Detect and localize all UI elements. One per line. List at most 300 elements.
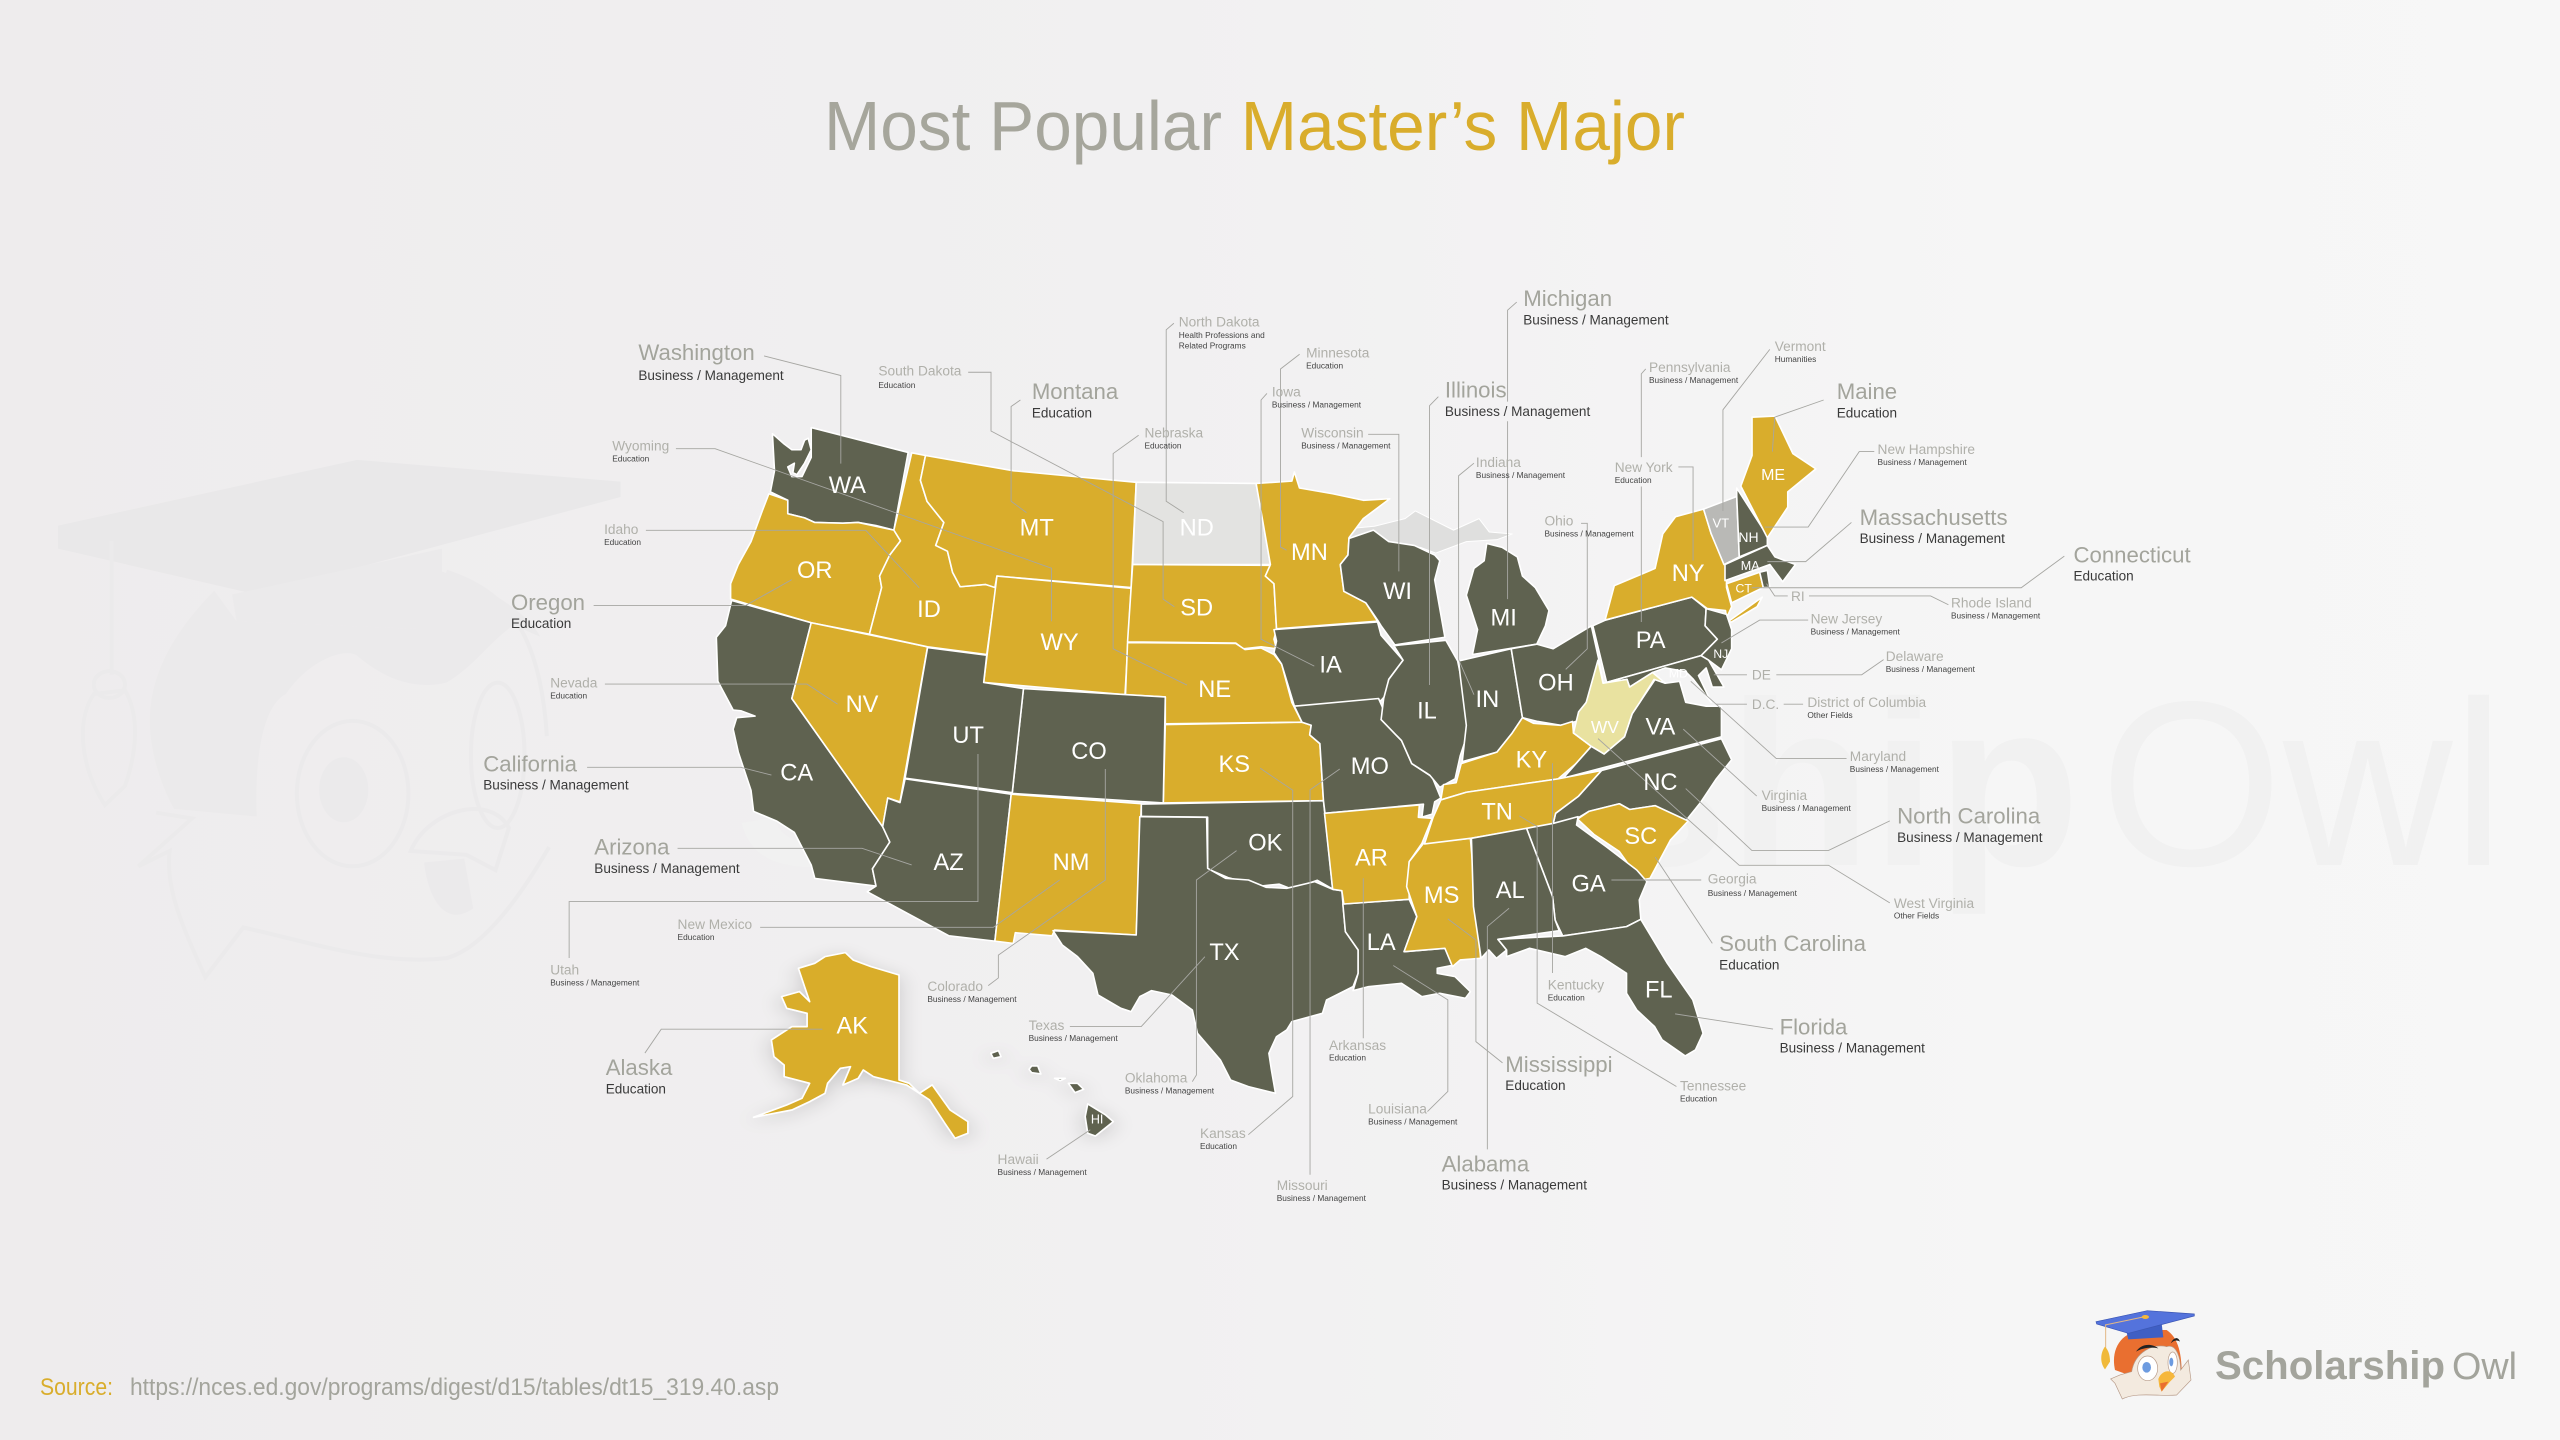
callout: New Jersey (1811, 612, 1900, 637)
callout: Texas (1029, 1018, 1118, 1043)
source line: https://nces.ed.gov/programs/digest/d15/tables/dt15_319.40.asp (130, 1374, 779, 1401)
leader: Missouri (1310, 769, 1340, 1175)
leader: New Jersey (1721, 620, 1808, 643)
icon: owl with graduation cap (2096, 1311, 2194, 1399)
callout: Maine: Education (1837, 405, 1897, 420)
callout: New Jersey: Business / Management (1811, 627, 1900, 637)
callout: Missouri: Business / Management (1277, 1193, 1367, 1203)
leader: Georgia (1611, 879, 1701, 881)
south-eastern states (1471, 817, 1703, 1056)
abbreviation: DE: DE (1752, 668, 1771, 683)
callout: Georgia (1708, 871, 1798, 898)
state: AZ (867, 779, 1011, 941)
callout: Hawaii: Hawaii (998, 1152, 1039, 1167)
state abbreviations: OH (1538, 671, 1574, 697)
state: MI (1466, 544, 1549, 654)
state: NY (1605, 509, 1732, 620)
state abbreviations: ND (1180, 516, 1214, 542)
leader: Kansas (1248, 768, 1293, 1135)
callout: Idaho (604, 522, 641, 547)
source line: Source: (40, 1374, 113, 1401)
leader: Wyoming (676, 449, 1051, 621)
callout: Kansas (1200, 1126, 1246, 1151)
leader: Pennsylvania (1641, 369, 1646, 622)
leader: Maine (1772, 400, 1824, 452)
callout: Alabama: Alabama (1442, 1151, 1530, 1176)
callout: Arkansas (1329, 1038, 1386, 1063)
state: UT (905, 648, 1023, 793)
state: MS (1404, 838, 1481, 967)
callout: Oregon (511, 590, 585, 631)
leader: Oklahoma (1192, 851, 1237, 1082)
callout: Nevada: Nevada (550, 675, 598, 690)
state: NC (1553, 739, 1732, 824)
callout: Pennsylvania (1649, 360, 1739, 385)
callout: Colorado (927, 979, 1017, 1004)
callout: North Dakota: Health Professions and (1179, 330, 1265, 340)
callout: North Dakota (1179, 315, 1265, 351)
state: WV (1573, 660, 1665, 754)
callout: Nebraska: Nebraska (1144, 426, 1204, 441)
callout: Maryland: Business / Management (1850, 764, 1940, 774)
callout: Kentucky: Education (1548, 992, 1585, 1002)
callout: Wisconsin: Business / Management (1301, 440, 1391, 450)
callout: New York (1615, 460, 1673, 485)
callout: Kentucky (1548, 977, 1604, 1002)
state abbreviations: IL (1417, 698, 1437, 724)
state: MO (1294, 699, 1441, 817)
state abbreviations: TX (1209, 940, 1240, 966)
callout: Maine (1837, 379, 1897, 420)
callout: Alabama: Business / Management (1442, 1178, 1587, 1193)
state: KS (1163, 722, 1323, 803)
state: CA (716, 601, 890, 886)
watermark: wordmark: Scholarship (735, 652, 2080, 915)
state: LA (1343, 899, 1470, 998)
callout: California: Business / Management (483, 778, 629, 793)
state abbreviations: NV (846, 692, 879, 718)
callout: West Virginia: West Virginia (1894, 896, 1974, 911)
state: WA (770, 428, 908, 530)
callout: New Hampshire (1878, 442, 1975, 467)
state abbreviations: UT (952, 723, 984, 749)
state: NM (995, 794, 1141, 943)
state: MT (920, 455, 1136, 588)
leader: Rhode Island (1809, 596, 1948, 605)
state: ND (1133, 482, 1270, 565)
state abbreviations: MS (1424, 883, 1459, 909)
leader: Louisiana (1393, 966, 1448, 1112)
state abbreviations: MD (1669, 667, 1688, 681)
callout: Arizona: Arizona (594, 835, 670, 860)
callout: Tennessee (1680, 1079, 1747, 1104)
leader: South Carolina (1655, 857, 1712, 943)
leader: Maryland (1691, 681, 1847, 759)
callout: Florida: Business / Management (1780, 1041, 1925, 1056)
leader: District of Columbia (1716, 703, 1803, 705)
callout: California (483, 751, 629, 793)
callout: Hawaii: Business / Management (998, 1167, 1087, 1177)
state abbreviations: NJ (1713, 647, 1728, 661)
callout: Oklahoma: Business / Management (1125, 1085, 1215, 1095)
upper Michigan and Great Lakes shading (1280, 509, 1512, 553)
state: CT (1727, 572, 1763, 603)
state: ID (869, 453, 996, 654)
state abbreviations: AR (1355, 845, 1388, 871)
callout: Pennsylvania: Pennsylvania (1649, 360, 1731, 375)
callout: Alaska: Alaska (606, 1055, 673, 1080)
callout: Maryland (1850, 749, 1940, 774)
callout: Maryland: Maryland (1850, 749, 1906, 764)
watermark: wordmark: Owl (2100, 652, 2505, 915)
state abbreviations: WI (1383, 579, 1412, 605)
state: AK (754, 953, 968, 1138)
callout: Rhode Island: Rhode Island (1951, 595, 2032, 610)
state: TN (1424, 770, 1602, 844)
state: VA (1563, 679, 1721, 778)
callout: North Dakota: Related Programs (1179, 341, 1246, 351)
state: NJ (1701, 609, 1732, 670)
callout: Wyoming: Wyoming (612, 439, 669, 454)
callout: Michigan: Business / Management (1523, 312, 1669, 327)
callout: New York: New York (1615, 460, 1673, 475)
callout: Oregon: Education (511, 616, 571, 631)
state: NY Long Island (1728, 597, 1762, 622)
leader: West Virginia (1598, 739, 1890, 903)
callout: New Mexico (678, 917, 753, 942)
callout: Wisconsin: Wisconsin (1301, 426, 1364, 441)
state: SC (1578, 804, 1688, 880)
state: CO (1012, 689, 1165, 803)
leader: Wisconsin (1368, 434, 1399, 571)
state abbreviations: WA (829, 473, 866, 499)
callout: North Carolina: Business / Management (1897, 830, 2043, 845)
callout: Virginia (1762, 788, 1851, 813)
callout: Oklahoma (1125, 1070, 1215, 1095)
callout: Rhode Island: Business / Management (1951, 610, 2041, 620)
callout: Mississippi: Education (1505, 1078, 1566, 1093)
state abbreviations: NE (1198, 677, 1231, 703)
callout: Illinois (1445, 378, 1590, 419)
callout: Missouri: Missouri (1277, 1178, 1328, 1193)
state: MN (1256, 472, 1390, 629)
callout: Texas: Business / Management (1029, 1033, 1118, 1043)
state abbreviations: IN (1476, 687, 1499, 713)
callout: Delaware (1886, 649, 1976, 674)
callout: Montana: Montana (1032, 379, 1119, 404)
callout: Wisconsin (1301, 426, 1391, 450)
state abbreviations: MA (1741, 559, 1760, 573)
state abbreviations: AZ (933, 850, 964, 876)
state abbreviations: OR (797, 558, 832, 584)
callout: Colorado: Colorado (927, 979, 983, 994)
callout: Nevada (550, 675, 598, 700)
callout: Michigan: Michigan (1523, 286, 1612, 311)
callout: Alaska: Education (606, 1081, 666, 1096)
callout: Vermont (1775, 339, 1826, 364)
leader: Arkansas (1362, 878, 1364, 1038)
leader: Illinois (1430, 397, 1438, 685)
callout: Connecticut: Connecticut (2073, 542, 2191, 567)
callout: Montana: Education (1032, 405, 1092, 420)
leader: Alabama (1487, 908, 1509, 1149)
state abbreviations: ME (1761, 467, 1785, 484)
south-central states (1053, 805, 1481, 1093)
callout: Alabama (1442, 1151, 1587, 1193)
callout: Iowa: Iowa (1272, 385, 1301, 400)
leader: Vermont (1723, 349, 1770, 511)
leader: New Hampshire (1765, 452, 1874, 527)
callout: Texas: Texas (1029, 1018, 1065, 1033)
leader: South Dakota (968, 372, 1174, 607)
leader: Iowa (1261, 393, 1314, 666)
state: FL (1498, 919, 1703, 1056)
callout: Georgia: Georgia (1708, 871, 1757, 886)
state: WI (1340, 530, 1445, 645)
leader: Colorado (988, 769, 1105, 986)
leader: Nevada (605, 684, 838, 704)
state: WY (984, 576, 1131, 695)
logo wordmark: Owl (2452, 1346, 2517, 1388)
callout: Louisiana: Business / Management (1368, 1116, 1458, 1126)
callout: South Dakota: South Dakota (878, 364, 962, 379)
state: AR (1324, 805, 1432, 904)
state: GA (1527, 817, 1647, 936)
callout: Virginia: Virginia (1762, 788, 1807, 803)
abbreviation: D.C.: D.C. (1752, 697, 1779, 712)
callout: Iowa (1272, 385, 1362, 410)
state: IL (1381, 640, 1468, 787)
title: Most Popular Master’s Major (824, 87, 1685, 165)
leader: Alaska (645, 1029, 822, 1053)
callout: North Carolina (1897, 804, 2043, 845)
logo wordmark: Scholarship (2215, 1344, 2445, 1388)
callout: Illinois: Business / Management (1445, 404, 1590, 419)
callout: Arizona (594, 835, 740, 876)
state abbreviations: FL (1645, 978, 1673, 1004)
callout: Maine: Maine (1837, 379, 1897, 404)
leader: Massachusetts (1767, 522, 1851, 562)
state: OR (731, 494, 901, 634)
callout: Mississippi: Mississippi (1505, 1052, 1613, 1077)
state abbreviations: NM (1053, 850, 1089, 876)
state: HI (991, 1051, 1113, 1136)
callout: Florida: Florida (1780, 1014, 1848, 1039)
leader: North Dakota (1166, 323, 1184, 513)
callout: Utah: Utah (550, 963, 579, 978)
callout: Georgia: Business / Management (1708, 888, 1798, 898)
callout: Alaska (606, 1055, 673, 1096)
state: KY (1441, 718, 1591, 800)
callout: Indiana: Indiana (1476, 455, 1521, 470)
callout: Missouri (1277, 1178, 1367, 1203)
callout: Tennessee: Education (1680, 1094, 1717, 1104)
callout: Utah: Business / Management (550, 978, 640, 988)
callout: Wyoming: Education (612, 454, 650, 464)
callout: North Carolina: North Carolina (1897, 804, 2041, 829)
callout: Louisiana: Louisiana (1368, 1101, 1427, 1116)
callout: South Carolina: Education (1719, 957, 1779, 972)
callout: Florida (1780, 1014, 1925, 1056)
state: IN (1459, 649, 1522, 762)
callout: North Dakota: North Dakota (1179, 315, 1260, 330)
state abbreviations: NY (1672, 561, 1705, 587)
leader: Kentucky (1551, 763, 1553, 973)
callout: Minnesota: Minnesota (1306, 346, 1370, 361)
callout: Arkansas: Education (1329, 1053, 1366, 1063)
callout: Nebraska: Education (1144, 440, 1182, 450)
state abbreviations: KY (1516, 747, 1547, 773)
state: VT (1704, 496, 1739, 565)
leader: Washington (764, 356, 841, 464)
state: MA (1725, 545, 1795, 582)
callout: Idaho: Idaho (604, 522, 639, 537)
state abbreviations: MT (1020, 516, 1054, 542)
callout: Kentucky: Kentucky (1548, 977, 1604, 992)
state abbreviations: SC (1624, 824, 1657, 850)
state: NV (792, 623, 928, 827)
leader: Hawaii (1047, 1130, 1090, 1159)
callout: Washington: Business / Management (638, 368, 784, 383)
callout: California: California (483, 751, 578, 776)
callout: Idaho: Education (604, 537, 641, 547)
text and leader lines layer (483, 286, 2191, 1203)
callout: Wyoming (612, 439, 669, 464)
leader: Florida (1675, 1014, 1773, 1029)
leader: Tennessee (1519, 816, 1676, 1087)
state abbreviations: WY (1041, 630, 1079, 656)
callout: Delaware: Business / Management (1886, 664, 1976, 674)
callout: Ohio (1544, 514, 1634, 539)
leader: North Carolina (1686, 789, 1890, 850)
callout: Arkansas: Arkansas (1329, 1038, 1386, 1053)
callout: Kansas: Kansas (1200, 1126, 1246, 1141)
callout: Ohio: Ohio (1544, 514, 1574, 529)
state: NH (1737, 488, 1767, 557)
callout: Vermont: Vermont (1775, 339, 1826, 354)
leader: Utah (569, 754, 978, 958)
leader: Minnesota (1280, 354, 1300, 550)
leader: Delaware (1714, 660, 1884, 675)
callout: Delaware: Delaware (1886, 649, 1944, 664)
callout: Connecticut: Education (2073, 569, 2134, 584)
state abbreviations (780, 467, 1785, 1126)
callout: Colorado: Business / Management (927, 994, 1017, 1004)
callout: South Dakota (878, 364, 962, 390)
state: TX (1053, 817, 1358, 1093)
callout: District of Columbia: Other Fields (1807, 710, 1853, 720)
callout: Indiana (1476, 455, 1566, 480)
callout: Washington: Washington (638, 340, 755, 365)
callout: New Hampshire: New Hampshire (1878, 442, 1975, 457)
callout: District of Columbia: District of Columbia (1807, 695, 1927, 710)
leader: RI to state (1767, 584, 1788, 596)
state: IA (1274, 622, 1403, 706)
watermark: owl mascot (58, 460, 620, 977)
state abbreviations: OK (1248, 831, 1283, 857)
state abbreviations: CO (1071, 739, 1107, 765)
callout: New Mexico: Education (678, 932, 715, 942)
state abbreviations: VT (1712, 515, 1729, 530)
state abbreviations: PA (1636, 628, 1666, 654)
callout: Washington (638, 340, 784, 383)
callout: Massachusetts: Business / Management (1860, 531, 2005, 546)
callout: Montana (1032, 379, 1119, 420)
callout: Ohio: Business / Management (1544, 529, 1634, 539)
state abbreviations: AL (1496, 878, 1525, 904)
callout: New York: Education (1615, 475, 1652, 485)
state abbreviations: ID (917, 597, 941, 623)
map of US states (716, 416, 1816, 1138)
callout: Oregon: Oregon (511, 590, 585, 615)
callout: Louisiana (1368, 1101, 1458, 1126)
callout: Connecticut (2073, 542, 2191, 584)
callout: Arizona: Business / Management (594, 861, 740, 876)
state abbreviations: AK (836, 1013, 868, 1039)
state: OH (1511, 626, 1603, 725)
callout: West Virginia (1894, 896, 1974, 921)
state abbreviations: NC (1643, 770, 1677, 796)
state abbreviations: MO (1351, 754, 1389, 780)
state: PA (1593, 597, 1717, 682)
state abbreviations: CA (780, 760, 813, 786)
leader: Ohio (1566, 523, 1587, 669)
state: RI (1760, 570, 1770, 588)
callout: South Carolina: South Carolina (1719, 931, 1867, 956)
western and central states (716, 428, 1468, 943)
state abbreviations: NH (1738, 529, 1759, 545)
state abbreviations: MI (1491, 605, 1517, 631)
state abbreviations: VA (1645, 715, 1676, 741)
state: ME (1741, 416, 1816, 538)
state abbreviations: SD (1180, 596, 1213, 622)
callout: South Dakota: Education (878, 380, 916, 390)
callout: West Virginia: Other Fields (1894, 911, 1939, 921)
leader: Texas (1070, 957, 1205, 1027)
leader: Montana (1011, 400, 1026, 513)
callout: Rhode Island (1951, 595, 2041, 620)
state abbreviations: MN (1291, 540, 1328, 566)
state abbreviations: LA (1367, 930, 1396, 956)
callout: Utah (550, 963, 640, 988)
callout: South Carolina (1719, 931, 1867, 972)
leader: Michigan (1508, 302, 1517, 599)
abbreviation: RI: RI (1791, 589, 1805, 604)
state abbreviations: IA (1319, 653, 1342, 679)
callout: Vermont: Humanities (1775, 354, 1816, 364)
leader: Virginia (1683, 729, 1757, 796)
callout: Nebraska (1144, 426, 1204, 450)
state: NE (1126, 643, 1302, 724)
state: SD (1128, 565, 1277, 649)
leader: Oregon (594, 580, 792, 605)
state: OK (1141, 801, 1333, 889)
callout: Massachusetts (1860, 505, 2008, 546)
leader: New Mexico (760, 880, 1060, 927)
state: MD and DE (1603, 656, 1724, 702)
leader: Nebraska (1113, 435, 1187, 685)
callout: Minnesota: Education (1306, 360, 1343, 370)
callout: Hawaii (998, 1152, 1087, 1177)
callout: Tennessee: Tennessee (1680, 1079, 1747, 1094)
callout: Oklahoma: Oklahoma (1125, 1070, 1188, 1085)
state abbreviations: HI (1091, 1112, 1103, 1126)
callout: District of Columbia (1807, 695, 1927, 720)
leader: New York (1678, 467, 1693, 561)
state abbreviations: WV (1591, 717, 1619, 737)
callout: Virginia: Business / Management (1762, 803, 1851, 813)
state: AL (1471, 828, 1559, 958)
